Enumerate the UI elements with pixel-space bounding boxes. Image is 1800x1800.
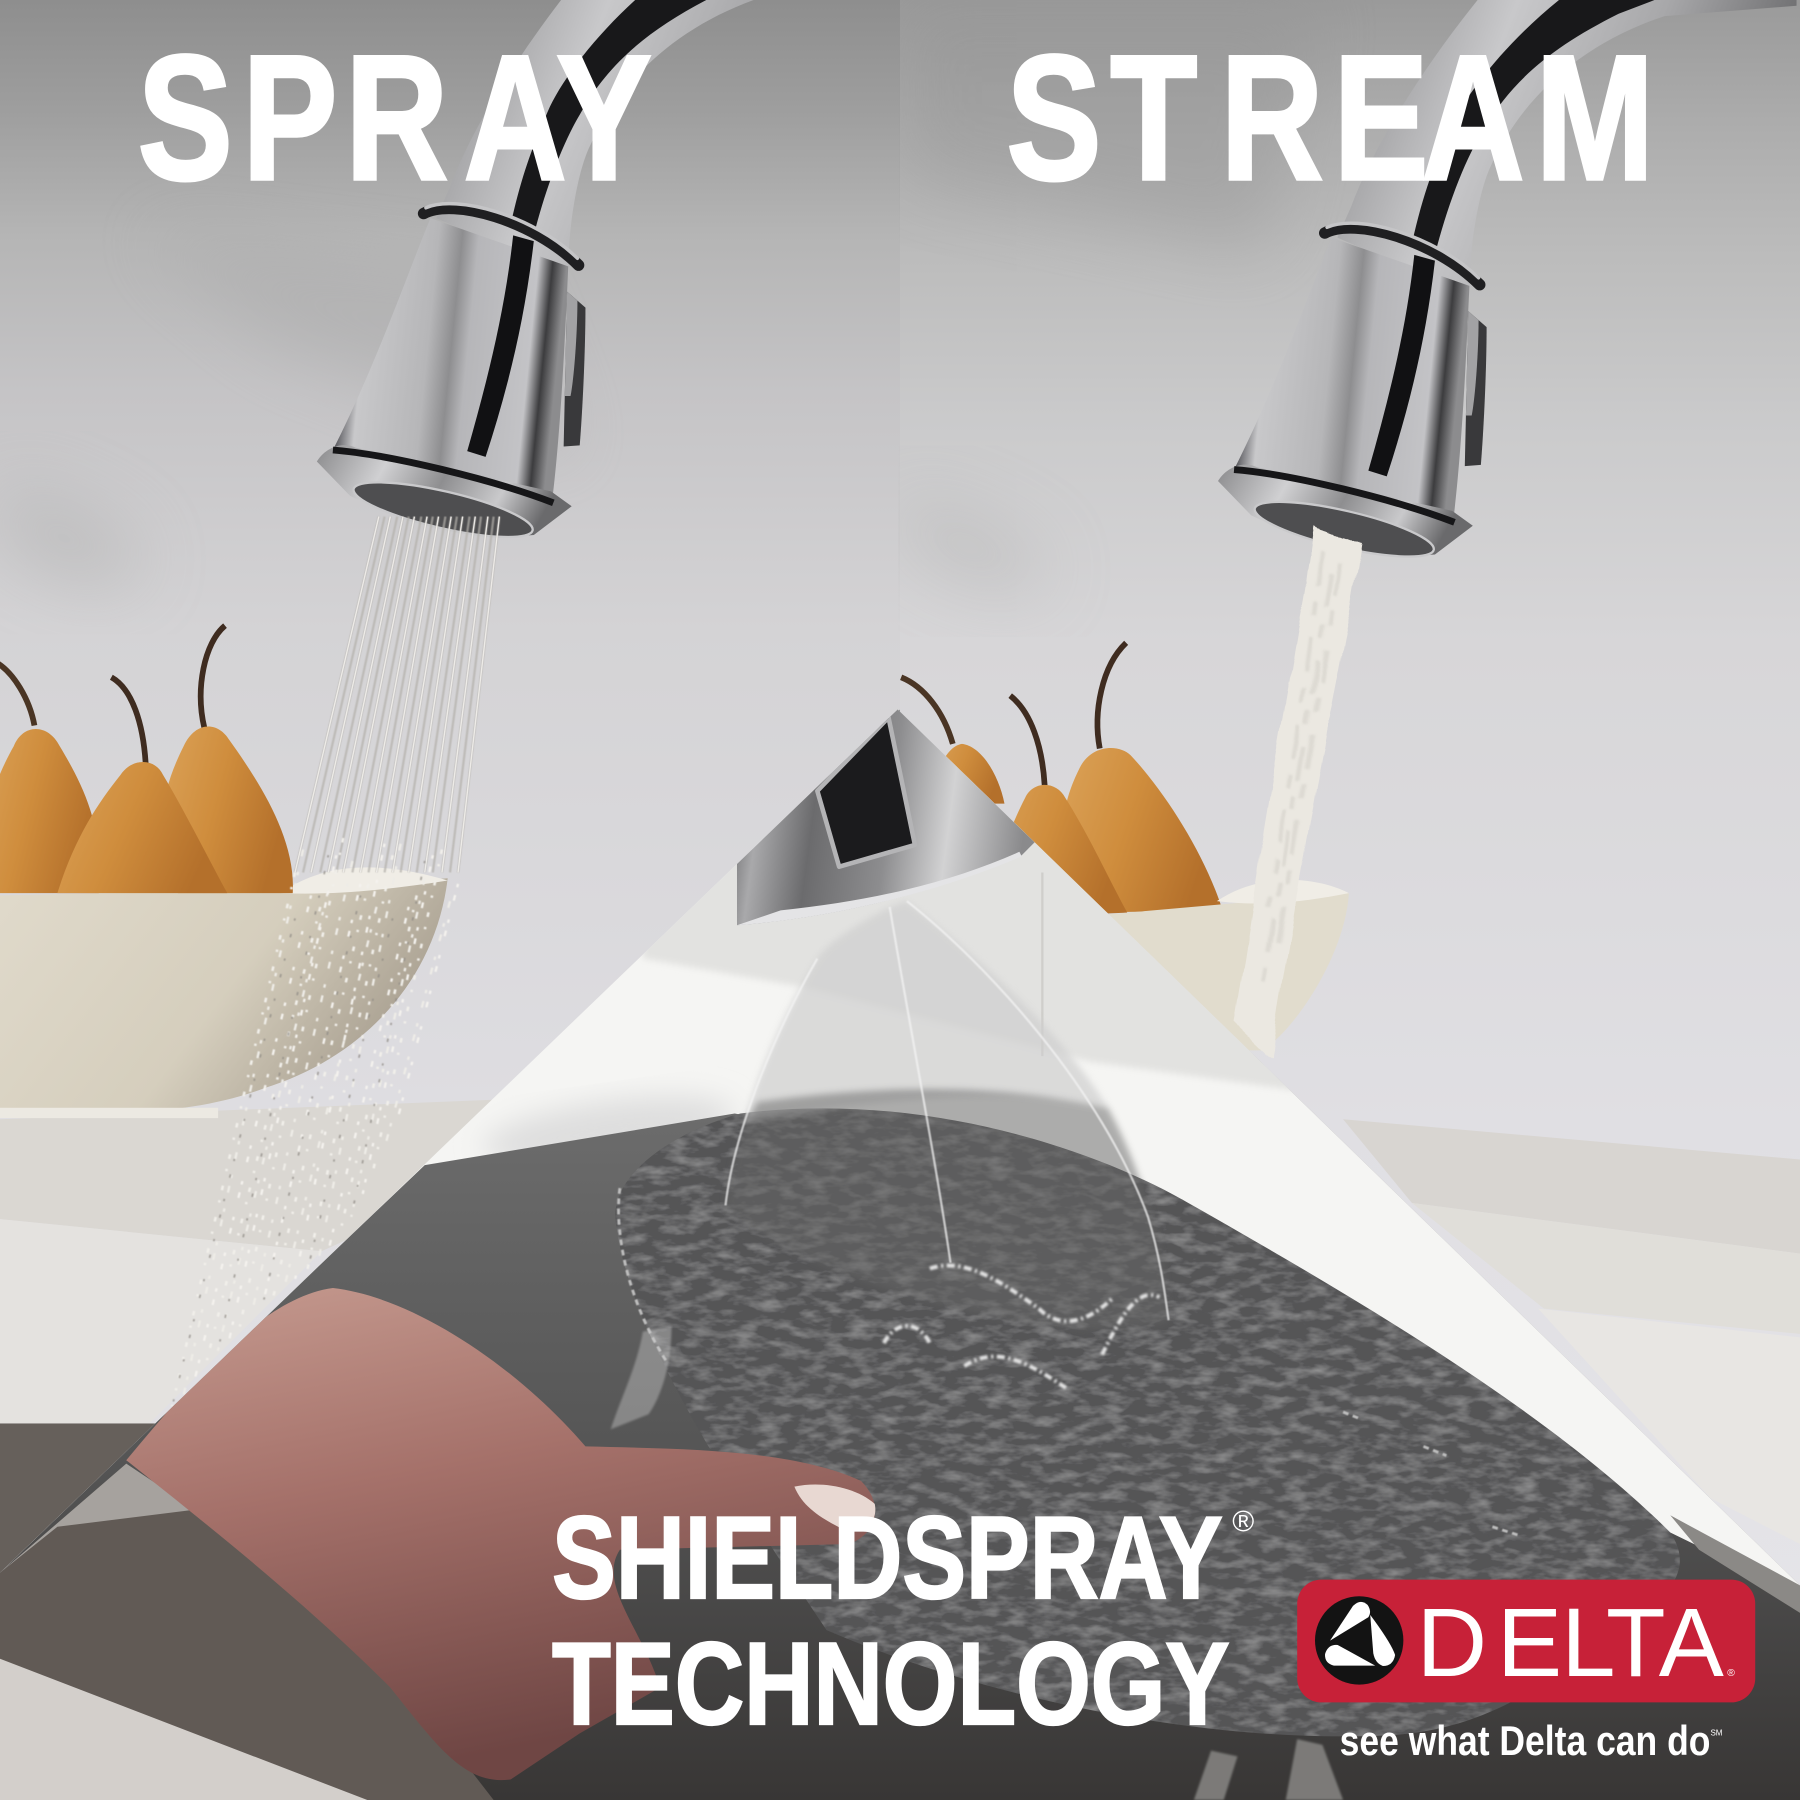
logo: delta: DELTA xyxy=(1417,1588,1724,1697)
logo: delta: ® xyxy=(1727,1668,1735,1679)
logo: delta xyxy=(1297,1580,1755,1702)
water droplets under the plate xyxy=(1194,1739,1343,1800)
faucet head from below xyxy=(737,700,1039,925)
water sheet on plate xyxy=(615,1108,1680,1736)
panel: shieldspray photo xyxy=(0,689,1800,1800)
hand xyxy=(126,1288,875,1780)
pears xyxy=(0,626,293,893)
faucet head, stream xyxy=(1218,0,1797,568)
pears xyxy=(901,643,1223,918)
panel: spray photo xyxy=(0,0,900,1573)
heading: shieldspray technology: SHIELDSPRAY xyxy=(552,1492,1223,1623)
water bell xyxy=(619,901,1521,1536)
heading: shieldspray technology: ® xyxy=(1232,1505,1254,1538)
dark sink behind the sheet of water xyxy=(0,1114,1800,1800)
heading: stream: STREAM xyxy=(1007,19,1654,218)
heading: shieldspray technology: TECHNOLOGY xyxy=(552,1618,1229,1749)
fruit bowl xyxy=(1091,880,1349,1050)
countertop xyxy=(1344,1120,1800,1334)
tagline: SM xyxy=(1710,1729,1723,1738)
stream of water xyxy=(1234,526,1361,1058)
spray water xyxy=(172,517,499,1406)
heading: spray: SPRAY xyxy=(138,19,651,218)
panel: stream photo xyxy=(900,0,1800,1607)
tagline: see what Delta can do xyxy=(1340,1718,1710,1764)
faucet head, spray xyxy=(317,0,753,536)
countertop xyxy=(0,1100,492,1572)
heading: shieldspray technology xyxy=(552,1492,1254,1749)
icon: delta triangle xyxy=(1315,1596,1403,1685)
fruit bowl xyxy=(0,867,448,1118)
